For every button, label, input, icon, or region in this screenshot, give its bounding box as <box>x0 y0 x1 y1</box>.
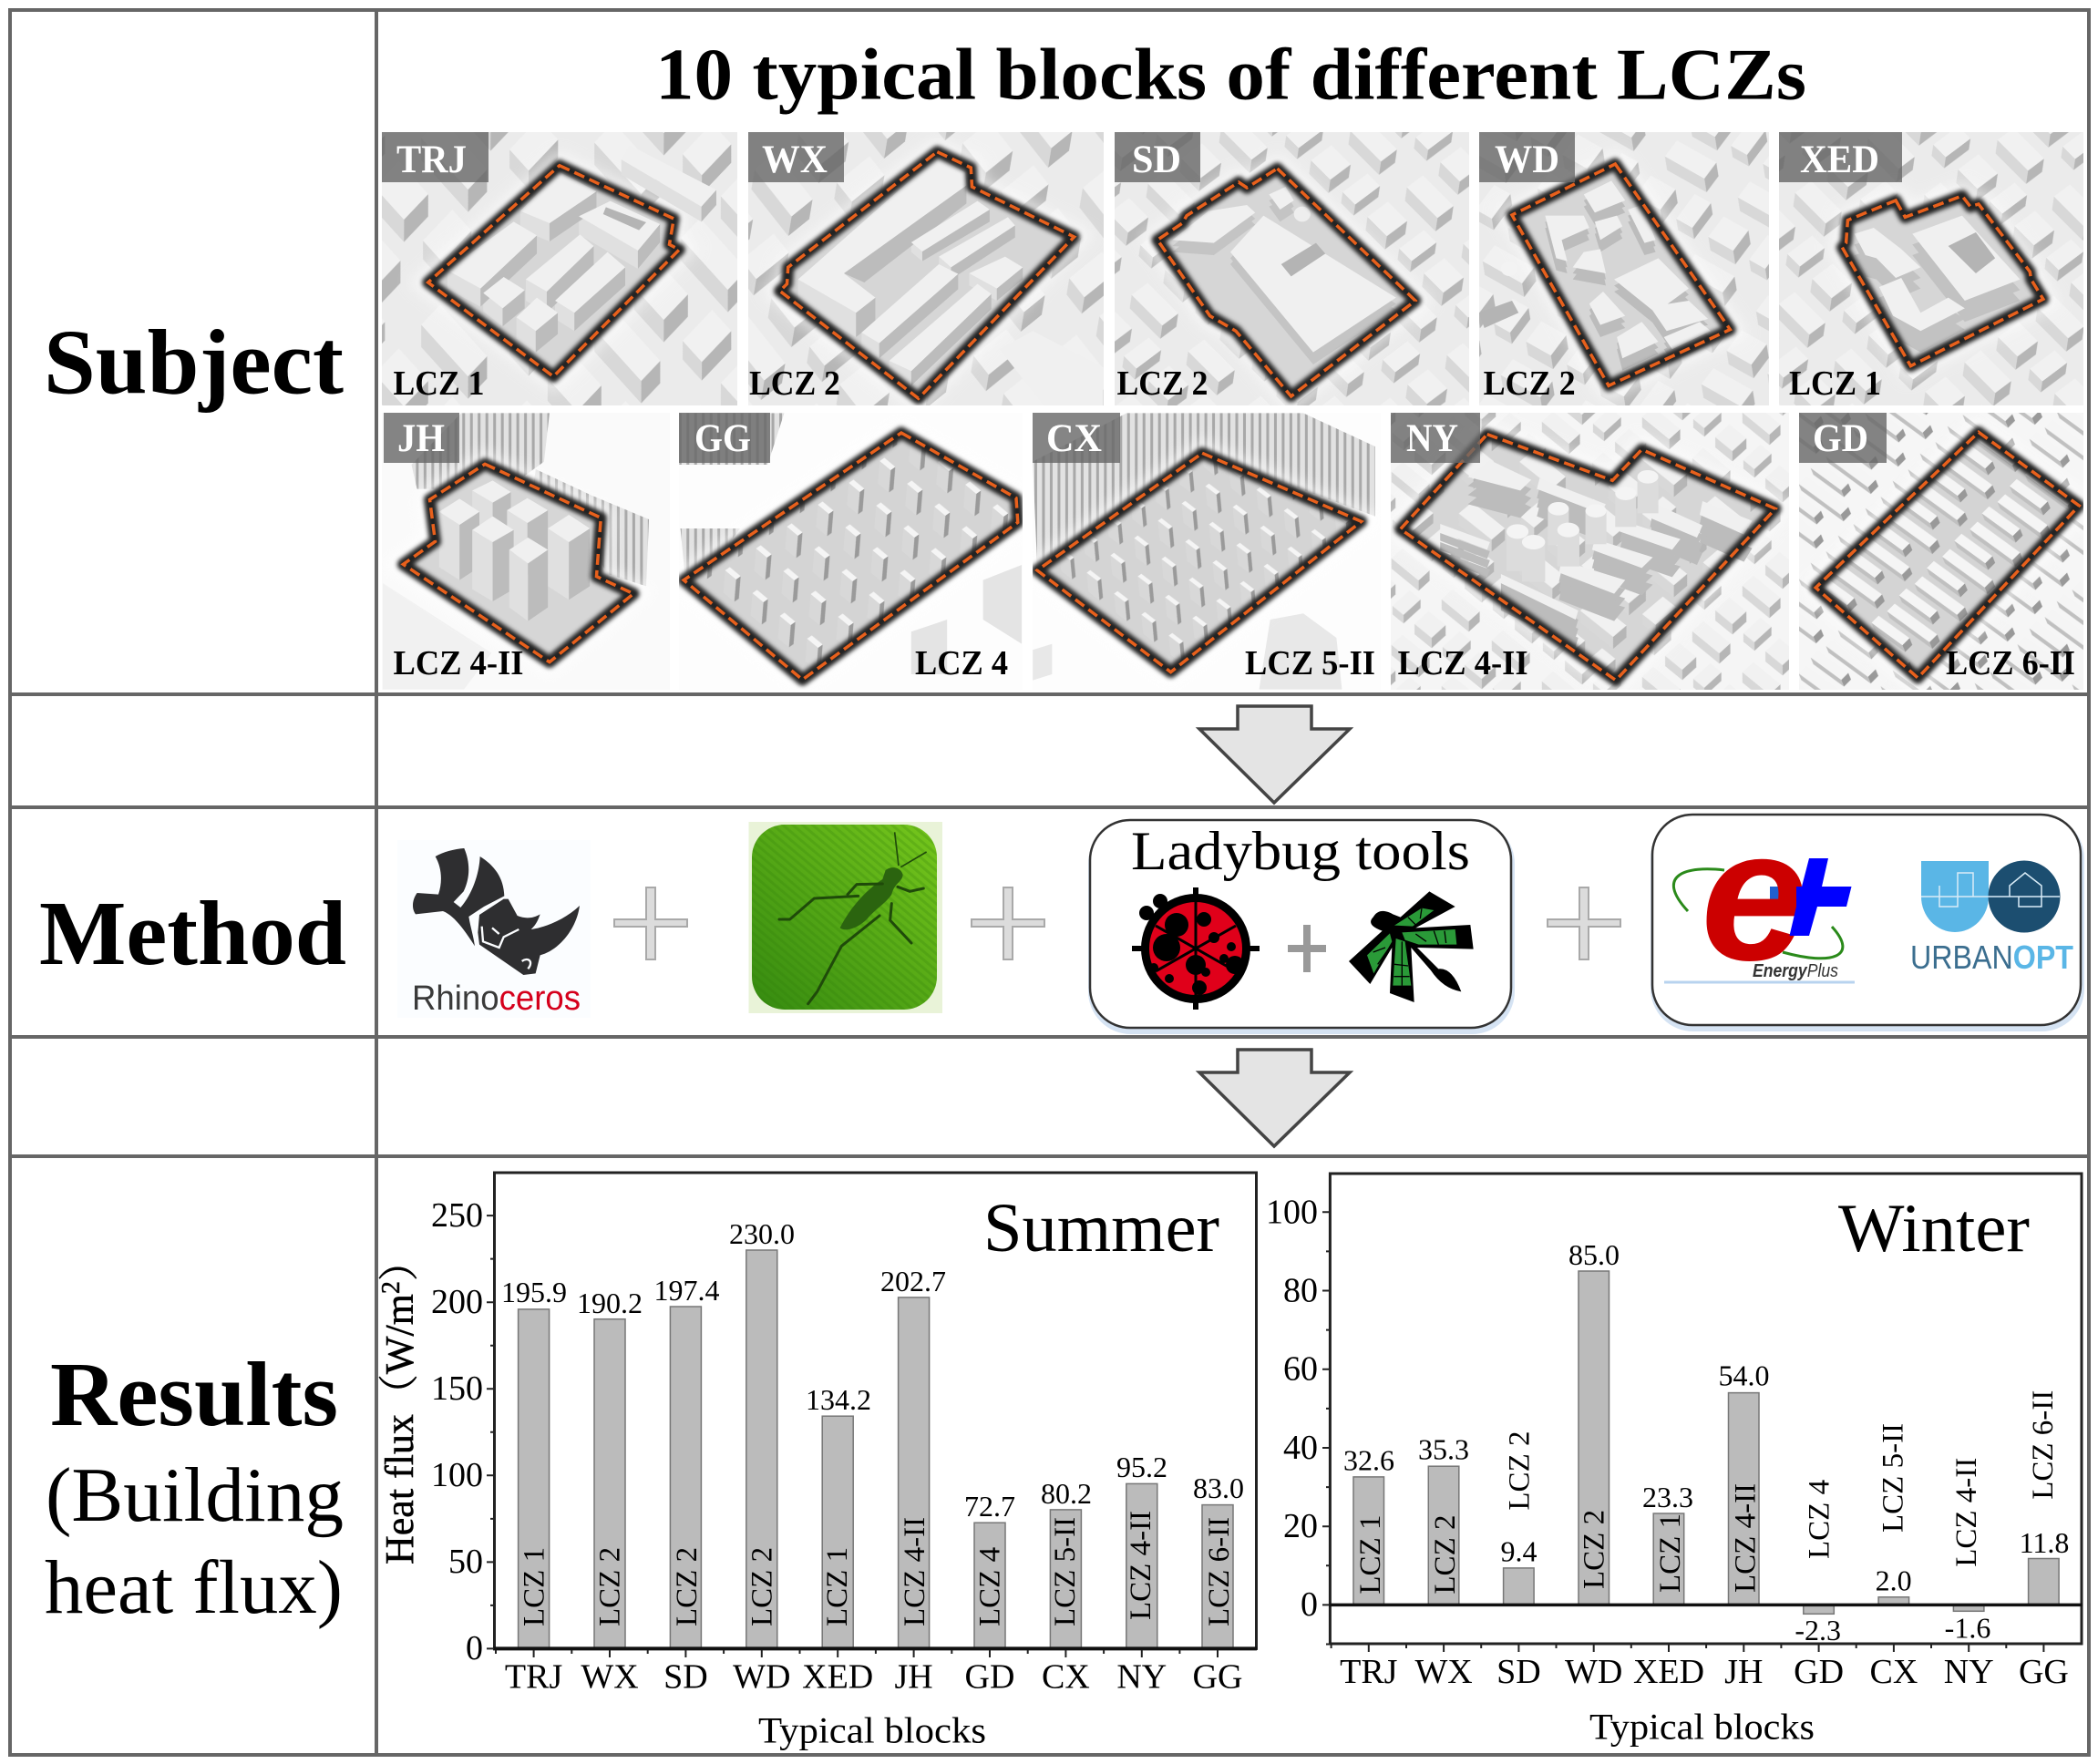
Summer LCZ labels in bars <box>518 1511 1236 1626</box>
Winter axes <box>1322 1174 2083 1652</box>
heading: Method: Method <box>39 882 346 984</box>
Summer x tick labels: GG <box>1193 1658 1242 1697</box>
panel: typical block WD: WD <box>1495 138 1559 181</box>
Summer value labels: 230.0 <box>729 1217 795 1250</box>
Summer x tick labels: CX <box>1042 1658 1090 1697</box>
title: 10 typical blocks of different LCZs <box>655 35 1806 115</box>
Winter x tick labels: TRJ <box>1340 1653 1397 1691</box>
Winter value labels: 11.8 <box>2020 1526 2069 1559</box>
panel: typical block JH: JH <box>397 417 445 460</box>
Winter value labels: 54.0 <box>1719 1359 1770 1392</box>
Winter LCZ labels: LCZ 2 <box>1579 1510 1611 1589</box>
arrow: method to results <box>1199 1050 1350 1146</box>
logo: EnergyPlus: e <box>1701 791 1808 1000</box>
panel: typical block WX: LCZ 2 <box>749 364 840 403</box>
Summer value labels: 134.2 <box>806 1383 871 1416</box>
Summer value labels: 95.2 <box>1116 1451 1167 1483</box>
chart: Winter heat flux <box>1266 1174 2083 1747</box>
Summer LCZ labels in bars: LCZ 4 <box>973 1547 1006 1626</box>
Summer bars <box>519 1250 1233 1648</box>
Winter x tick labels: WX <box>1414 1653 1473 1691</box>
Winter y tick labels <box>1266 1194 1318 1624</box>
Winter value labels <box>1343 1238 2069 1646</box>
plus sign 2 <box>972 887 1044 959</box>
Summer axes <box>487 1173 1257 1657</box>
arrow: subject to method <box>1199 706 1350 803</box>
panel: typical block GD: LCZ 6-II <box>1946 644 2075 682</box>
Summer LCZ labels in bars: LCZ 4-II <box>899 1517 931 1626</box>
Summer value labels: 197.4 <box>654 1274 720 1307</box>
Summer x tick labels: NY <box>1116 1658 1167 1697</box>
Summer x tick labels: TRJ <box>505 1658 562 1697</box>
panel: typical block JH: LCZ 4-II <box>394 644 523 682</box>
Winter x tick labels: JH <box>1724 1653 1763 1691</box>
Winter LCZ labels: LCZ 1 <box>1354 1515 1387 1595</box>
Winter y tick labels: 20 <box>1283 1507 1318 1545</box>
Summer x tick labels <box>505 1658 1242 1697</box>
Winter LCZ labels: LCZ 1 <box>1654 1513 1687 1593</box>
panel: typical block CX <box>1033 413 1381 690</box>
Summer LCZ labels in bars: LCZ 1 <box>821 1547 854 1626</box>
panel: typical block WX: WX <box>762 138 828 181</box>
panel: typical block XED: XED <box>1800 138 1879 181</box>
panel: typical block XED <box>1779 132 2083 405</box>
Ladybug tools label: Ladybug tools <box>1131 821 1470 881</box>
logo: URBANopt: URBANOPT <box>1910 938 2073 976</box>
Winter LCZ labels: LCZ 4-II <box>1730 1483 1763 1593</box>
panel: typical block WX <box>748 132 1104 405</box>
icon: honeybee <box>1349 891 1474 1002</box>
panel: typical block SD <box>1115 132 1469 405</box>
Summer x tick labels: GD <box>965 1658 1014 1697</box>
heading: Results (Building heat flux) <box>45 1343 344 1630</box>
Summer heading: Summer <box>983 1190 1219 1267</box>
panel: typical block NY: LCZ 4-II <box>1398 644 1528 682</box>
panel: typical block WD: LCZ 2 <box>1484 364 1576 403</box>
Summer value labels: 202.7 <box>880 1265 946 1297</box>
Summer value labels <box>501 1217 1244 1523</box>
Summer LCZ labels in bars: LCZ 2 <box>746 1547 778 1626</box>
Summer y tick labels: 100 <box>431 1456 483 1494</box>
Winter value labels: -1.6 <box>1945 1612 1990 1645</box>
Summer LCZ labels in bars: LCZ 2 <box>671 1547 704 1626</box>
panel: typical block CX: LCZ 5-II <box>1245 644 1375 682</box>
Winter value labels: 32.6 <box>1343 1443 1394 1476</box>
panel: typical block GD <box>1799 413 2083 690</box>
panel: typical block SD: LCZ 2 <box>1117 364 1208 403</box>
Summer LCZ labels in bars: LCZ 6-II <box>1203 1517 1236 1626</box>
Summer y tick labels: 250 <box>431 1196 483 1235</box>
Summer y tick labels: 150 <box>431 1369 483 1408</box>
y axis title: heat flux: Heat flux（W/m <box>377 1294 422 1564</box>
panel: typical block XED: LCZ 1 <box>1789 364 1881 403</box>
logo: EnergyPlus <box>1664 791 1855 1000</box>
panel: typical block GD: GD <box>1813 417 1868 460</box>
Winter x tick labels: SD <box>1496 1653 1541 1691</box>
Summer y tick labels <box>431 1196 483 1667</box>
Winter value labels: 85.0 <box>1568 1238 1620 1271</box>
Summer LCZ labels in bars: LCZ 2 <box>594 1547 627 1626</box>
Winter value labels: -2.3 <box>1795 1614 1841 1646</box>
Winter y tick labels: 80 <box>1283 1272 1318 1310</box>
panel: EnergyPlus and URBANopt <box>1652 791 2082 1029</box>
logo: Grasshopper <box>749 822 942 1013</box>
Winter value labels: 9.4 <box>1500 1534 1537 1567</box>
Winter x tick labels: CX <box>1870 1653 1918 1691</box>
panel: Ladybug tools <box>1090 820 1512 1031</box>
Summer value labels: 190.2 <box>577 1287 643 1319</box>
chart: Summer heat flux <box>377 1173 1257 1751</box>
Summer value labels: 72.7 <box>964 1490 1015 1523</box>
Summer value labels: 83.0 <box>1193 1472 1244 1504</box>
heading: Results (Building heat flux): (Building <box>46 1452 344 1538</box>
Summer LCZ labels in bars: LCZ 4-II <box>1125 1511 1157 1620</box>
Winter heading: Winter <box>1838 1191 2030 1267</box>
logo: URBANopt <box>1910 860 2073 976</box>
logo: Rhinoceros: Rhinoceros <box>412 979 581 1018</box>
panel: typical block CX: CX <box>1046 417 1102 460</box>
Summer LCZ labels in bars: LCZ 1 <box>518 1547 550 1626</box>
heading: Subject: Subject <box>44 312 344 414</box>
panel: typical block TRJ: LCZ 1 <box>394 364 485 403</box>
Winter value labels: 23.3 <box>1642 1481 1693 1513</box>
Winter y tick labels: 40 <box>1283 1429 1318 1467</box>
Winter x tick labels: WD <box>1565 1653 1622 1691</box>
y axis title: heat flux: 2 <box>377 1281 406 1294</box>
Winter x tick labels <box>1340 1653 2069 1691</box>
Winter y tick labels: 0 <box>1301 1585 1318 1624</box>
panel: typical block NY <box>1391 413 1789 690</box>
Winter x axis title: Typical blocks <box>1589 1706 1815 1747</box>
panel: typical block GG: LCZ 4 <box>915 644 1008 682</box>
Summer x axis title: Typical blocks <box>758 1710 986 1751</box>
Summer LCZ labels in bars: LCZ 5-II <box>1049 1517 1082 1626</box>
panel: typical block TRJ: TRJ <box>396 138 467 181</box>
Winter x tick labels: GD <box>1794 1653 1844 1691</box>
panel: typical block WD <box>1479 132 1769 405</box>
Winter y tick labels: 100 <box>1266 1194 1318 1232</box>
panel: typical block NY: NY <box>1406 417 1458 460</box>
Winter value labels: 2.0 <box>1876 1564 1912 1596</box>
Winter LCZ labels: LCZ 2 <box>1503 1431 1536 1511</box>
Winter LCZ labels: LCZ 2 <box>1429 1515 1462 1595</box>
Summer x tick labels: JH <box>894 1658 933 1697</box>
Summer x tick labels: XED <box>802 1658 873 1697</box>
y axis title: heat flux: ） <box>377 1241 422 1281</box>
Winter x tick labels: NY <box>1944 1653 1994 1691</box>
Winter x tick labels: XED <box>1633 1653 1704 1691</box>
Summer value labels: 195.9 <box>501 1276 567 1308</box>
logo: Rhinoceros <box>397 840 591 1018</box>
Summer x tick labels: WX <box>581 1658 639 1697</box>
logo: EnergyPlus: EnergyPlus <box>1753 961 1838 981</box>
Winter x tick labels: GG <box>2019 1653 2069 1691</box>
icon: ladybug <box>1132 887 1260 1010</box>
Winter LCZ labels: LCZ 5-II <box>1877 1423 1909 1533</box>
panel: typical block SD: SD <box>1132 138 1181 181</box>
Summer x tick labels: WD <box>733 1658 790 1697</box>
panel: typical block JH <box>382 413 670 690</box>
Winter LCZ labels: LCZ 4-II <box>1950 1458 1983 1567</box>
Winter bars <box>1353 1271 2059 1614</box>
plus sign 3 <box>1548 887 1620 959</box>
panel: typical block GG <box>679 413 1023 690</box>
Winter value labels: 35.3 <box>1418 1433 1469 1466</box>
plus sign 1 <box>614 887 687 959</box>
Winter y tick labels: 60 <box>1283 1350 1318 1389</box>
Summer y tick labels: 50 <box>448 1543 483 1581</box>
panel: typical block GG: GG <box>694 417 751 460</box>
heading: Results (Building heat flux): heat flux) <box>45 1545 343 1630</box>
Summer y tick labels: 200 <box>431 1283 483 1321</box>
panel: typical block TRJ <box>382 132 737 405</box>
Summer x tick labels: SD <box>663 1658 708 1697</box>
Winter LCZ labels: LCZ 4 <box>1803 1480 1836 1559</box>
Summer value labels: 80.2 <box>1041 1477 1092 1510</box>
small plus <box>1288 925 1326 972</box>
heading: Results (Building heat flux): Results <box>50 1343 338 1445</box>
Winter LCZ labels <box>1354 1390 2060 1595</box>
Winter LCZ labels: LCZ 6-II <box>2027 1390 2060 1500</box>
Summer y tick labels: 0 <box>466 1629 483 1667</box>
